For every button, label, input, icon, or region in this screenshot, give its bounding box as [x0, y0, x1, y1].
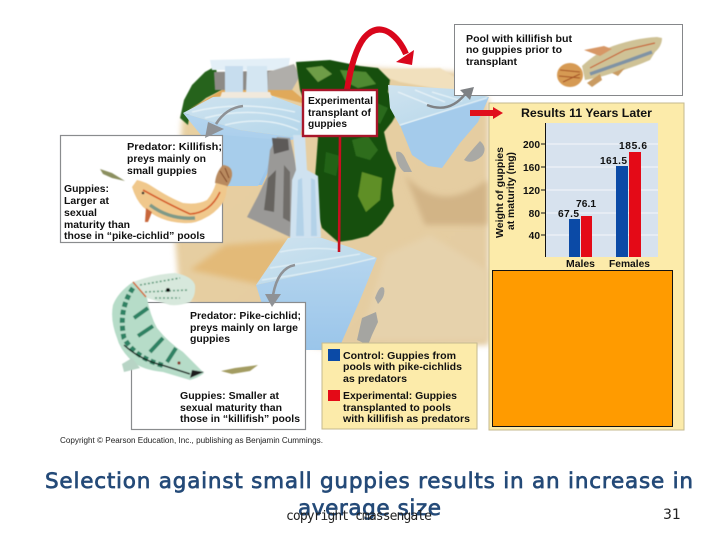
- text: predator pike-cichlid: guppies: [190, 334, 230, 345]
- category labels: [566, 259, 650, 270]
- legend swatch: experimental: [328, 390, 340, 401]
- results panel: [489, 103, 684, 430]
- legend text: experimental: with killifish as predators: [342, 414, 470, 425]
- legend: [322, 343, 477, 429]
- legend text: experimental: Experimental: Guppies: [343, 391, 457, 402]
- text: guppies larger: [64, 184, 205, 242]
- callout: experimental transplant: transplant of: [308, 108, 372, 119]
- callout: pike-cichlid pool: [112, 273, 305, 430]
- y-axis label: [495, 147, 517, 238]
- text: guppies smaller: Guppies: Smaller at: [180, 391, 280, 402]
- icon: pike-cichlid: [112, 273, 204, 380]
- lower pool face: [256, 258, 377, 350]
- icon: killifish: [557, 37, 662, 87]
- caption heading: average size: [298, 496, 441, 521]
- callout: experimental transplant: Experimental: [308, 96, 373, 107]
- arrow: upper pool to killifish callout: [205, 106, 243, 138]
- value labels: [558, 141, 647, 220]
- text: guppies smaller: [180, 391, 300, 425]
- value labels: 76.1: [576, 199, 596, 210]
- forest: [296, 60, 400, 242]
- text: predator killifish: preys mainly on: [127, 154, 206, 165]
- lower pool: [256, 238, 384, 350]
- right pool basin: [400, 97, 489, 168]
- text: predator killifish: Predator: Killifish;: [127, 142, 222, 153]
- icon: killifish: [132, 165, 232, 223]
- caption heading: Selection against small guppies results in an increase in: [45, 469, 693, 494]
- text: guppies smaller: those in “killifish” pools: [180, 414, 300, 425]
- y-axis label: Weight of guppies: [495, 147, 506, 238]
- text: pool description: no guppies prior to: [466, 45, 562, 56]
- callout: experimental transplant: [303, 90, 377, 136]
- upper pool front face: [183, 113, 300, 185]
- red arrow to results: [470, 107, 503, 119]
- text: guppies larger: Larger at: [64, 196, 110, 207]
- legend text: experimental: transplanted to pools: [343, 403, 451, 414]
- bars: males and females: [569, 152, 641, 257]
- center waterfall: [290, 135, 321, 240]
- legend text: control: Control: Guppies from: [343, 351, 456, 362]
- orange box: [492, 270, 672, 426]
- right pool: [388, 85, 489, 172]
- rocks by right pool: [396, 152, 412, 172]
- text: predator pike-cichlid: Predator: Pike-cichlid;: [190, 311, 301, 322]
- legend text: experimental: [342, 391, 470, 425]
- light sand ridge: [365, 68, 489, 98]
- axis tick labels: [523, 140, 540, 242]
- axis tick labels: 160: [523, 163, 540, 174]
- text: pool description: Pool with killifish but: [466, 34, 573, 45]
- center rock: [247, 137, 304, 237]
- bar chart: [495, 123, 658, 270]
- category labels: Males: [566, 259, 595, 270]
- footer: copyright: copyright cmassengale: [286, 509, 432, 524]
- value labels: 161.5: [600, 156, 627, 167]
- callout: experimental transplant: guppies: [308, 119, 347, 130]
- text: guppies larger: maturity than: [64, 220, 130, 231]
- value labels: 185.6: [619, 141, 647, 152]
- arrow: lower pool to pike callout: [265, 265, 295, 307]
- callout: killifish pool: [60, 136, 232, 242]
- green bank left: [180, 66, 222, 125]
- chart title: Results 11 Years Later: [521, 108, 653, 120]
- lower pool surface: [256, 238, 377, 285]
- upper pool surface: [183, 95, 305, 138]
- axis tick labels: 200: [523, 140, 540, 151]
- arrow: right pool to callout: [427, 87, 474, 108]
- river landscape illustration: [175, 58, 489, 350]
- red transplant arrow: [339, 29, 414, 252]
- axis tick labels: 40: [529, 231, 540, 242]
- y-axis label: at maturity (mg): [506, 152, 517, 230]
- upper waterfall: [210, 58, 300, 98]
- legend text: control: as predators: [343, 374, 407, 385]
- terrain: [175, 66, 489, 348]
- rocks by lower pool: [375, 287, 384, 304]
- icon: small guppy: [100, 169, 125, 181]
- text: guppies larger: those in “pike-cichlid” pools: [64, 231, 205, 242]
- value labels: 67.5: [558, 209, 579, 220]
- callout: pool with killifish: [454, 24, 682, 96]
- legend text: control: pools with pike-cichlids: [343, 362, 462, 373]
- text: predator pike-cichlid: preys mainly on large: [190, 323, 298, 334]
- legend text: control: [343, 351, 462, 385]
- icon: small guppy: [221, 365, 258, 374]
- sandy ledge upper: [188, 88, 310, 110]
- axis tick labels: 80: [529, 209, 540, 220]
- sand shading: [190, 175, 487, 340]
- category labels: Females: [609, 259, 650, 270]
- text: predator pike-cichlid: [190, 311, 301, 345]
- axis tick labels: 120: [523, 186, 540, 197]
- text: predator killifish: small guppies: [127, 166, 197, 177]
- text: guppies larger: Guppies:: [64, 184, 109, 195]
- text: pool description: transplant: [466, 57, 518, 68]
- text: guppies smaller: sexual maturity than: [180, 403, 282, 414]
- text: predator killifish: [127, 142, 222, 177]
- footer: page number: 31: [663, 507, 681, 523]
- legend swatch: control: [328, 349, 340, 361]
- copyright line: Copyright © Pearson Education, Inc., publishing as Benjamin Cummings.: [60, 436, 323, 445]
- text: guppies larger: sexual: [64, 208, 97, 219]
- right pool surface: [388, 85, 489, 126]
- text: pool description: [466, 34, 573, 68]
- caption heading: [45, 469, 693, 521]
